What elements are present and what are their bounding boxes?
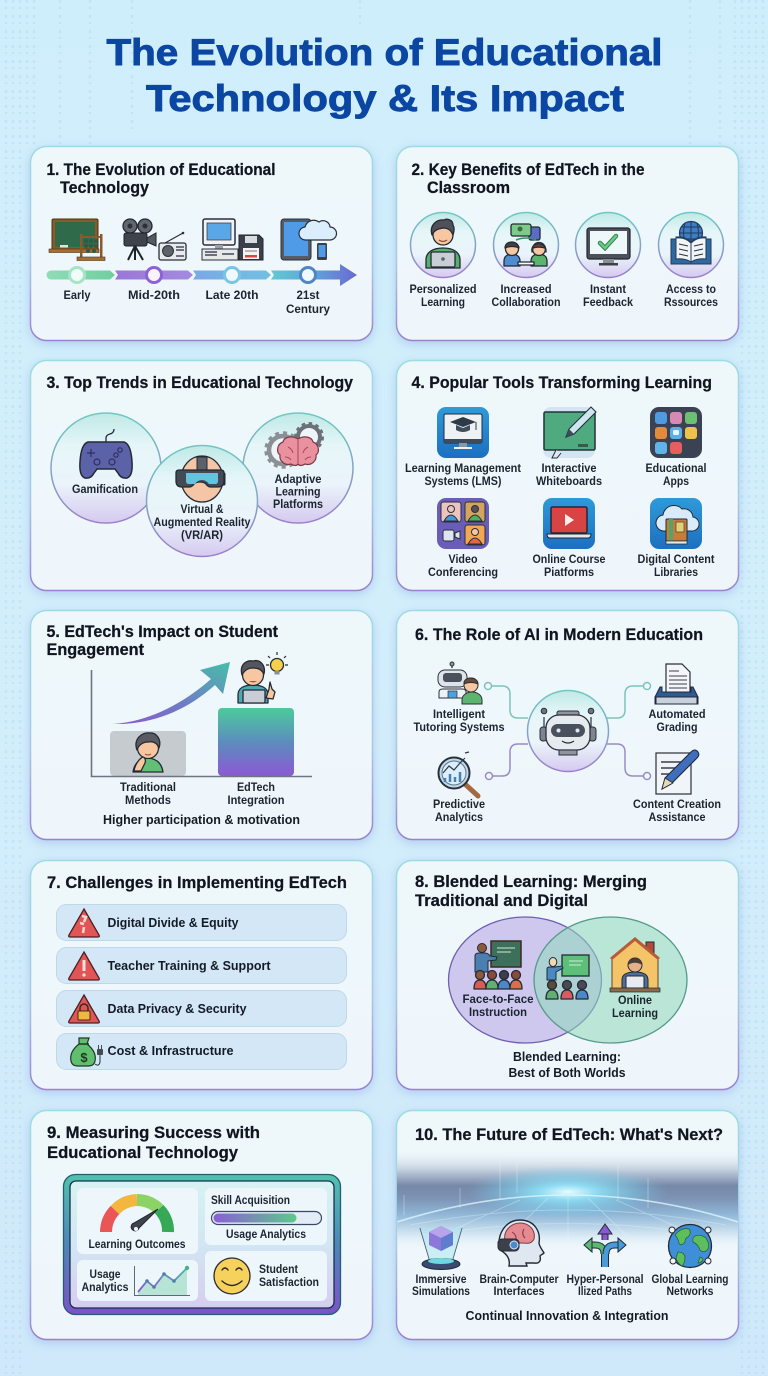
- benefit labels: [410, 284, 718, 309]
- chart labels: Methods: [125, 795, 171, 807]
- caption: best of both worlds: [508, 1049, 626, 1080]
- tile: skill acquisition: Skill Acquisition: [211, 1195, 290, 1207]
- circle: gamification: Gamification: [72, 484, 138, 496]
- future labels: [412, 1274, 728, 1298]
- icon: brain computer interface: [498, 1220, 544, 1266]
- icon: access to resources: [658, 212, 724, 278]
- heading 3: 3. Top Trends in Educational Technology: [46, 374, 354, 392]
- venn labels: Instruction: [469, 1007, 527, 1019]
- venn labels: Online: [618, 995, 652, 1007]
- icon: personalized learning: [410, 212, 476, 278]
- benefit labels: Personalized: [410, 284, 476, 296]
- future labels: Immersive: [416, 1274, 466, 1286]
- benefit labels: Collaboration: [492, 297, 560, 309]
- tile: learning outcomes gauge: Learning Outcomes: [88, 1239, 186, 1251]
- icon: chalkboard and abacus: [49, 219, 105, 260]
- heading 1: Technology: [60, 179, 150, 197]
- tool labels: Video: [448, 554, 478, 566]
- chart labels: [120, 782, 284, 807]
- timeline labels: 21st: [296, 290, 320, 302]
- heading 7: 7. Challenges in Implementing EdTech: [47, 874, 347, 892]
- panel: 8 blended learning: [396, 860, 738, 1090]
- bar chart: [92, 670, 312, 776]
- icon: online learning at home: [610, 938, 660, 992]
- timeline arrow: [46, 264, 357, 286]
- AI labels: Automated: [648, 709, 706, 721]
- heading 4: 4. Popular Tools Transforming Learning: [412, 374, 712, 392]
- icon: film camera and radio: [123, 219, 186, 260]
- row: cost and infrastructure: $: [80, 1050, 88, 1065]
- tile: learning management systems: [437, 407, 489, 458]
- title: The Evolution of Educational: [106, 32, 662, 73]
- circle: virtual and augmented reality: Virtual &: [180, 504, 224, 516]
- chart labels: EdTech: [237, 782, 275, 794]
- circle: adaptive learning: Adaptive: [274, 474, 322, 486]
- icon: immersive simulations: [420, 1226, 462, 1270]
- panel: 4 popular tools: [396, 360, 738, 590]
- AI labels: Analytics: [435, 812, 483, 824]
- icon: tablet cloud and phone: [281, 219, 337, 260]
- title: Technology & Its Impact: [146, 78, 624, 119]
- tile: skill acquisition: [205, 1188, 327, 1245]
- tool labels: Libraries: [654, 567, 698, 579]
- venn labels: Learning: [612, 1008, 658, 1020]
- tile: usage analytics chart: Usage: [90, 1269, 120, 1281]
- tile: online course platforms: [543, 498, 595, 549]
- icon: intelligent tutoring: [438, 662, 482, 704]
- tile: skill acquisition: Usage Analytics: [226, 1229, 306, 1241]
- future labels: Interfaces: [494, 1286, 544, 1298]
- icon: central AI robot: [528, 690, 608, 772]
- benefit labels: Rssources: [664, 297, 718, 309]
- tool labels: Whiteboards: [536, 476, 602, 488]
- caption: continual innovation: Continual Innovation & Integration: [466, 1308, 669, 1323]
- tile: student satisfaction: Student: [259, 1264, 298, 1276]
- row: digital divide: Digital Divide & Equity: [108, 915, 239, 930]
- row: teacher training: [56, 948, 346, 984]
- timeline labels: Late 20th: [206, 290, 258, 302]
- circle: adaptive learning: [243, 413, 353, 523]
- timeline labels: Century: [286, 304, 331, 316]
- icon: desktop computer and floppy: [202, 219, 263, 260]
- circle: virtual and augmented reality: (VR/AR): [181, 530, 223, 542]
- AI labels: Grading: [656, 722, 698, 734]
- growth arrow: [112, 662, 230, 724]
- heading 8: 8. Blended Learning: Merging: [415, 873, 647, 891]
- benefit labels: Feedback: [583, 297, 634, 309]
- AI labels: Intelligent: [433, 709, 485, 721]
- icon: predictive analytics: [438, 752, 478, 796]
- heading 5: [46, 623, 278, 659]
- circle: adaptive learning: Learning: [276, 486, 320, 498]
- tile: usage analytics chart: [77, 1260, 198, 1301]
- icon: global learning networks: [668, 1224, 712, 1268]
- AI labels: Predictive: [433, 799, 485, 811]
- icon: face to face teacher: [474, 941, 522, 989]
- venn labels: [462, 994, 658, 1020]
- heading 8: [415, 873, 647, 910]
- panel: 7 challenges: [30, 860, 372, 1090]
- icon: engaged student with laptop: [238, 652, 288, 703]
- future labels: Networks: [666, 1286, 714, 1298]
- future labels: Global Learning: [652, 1274, 728, 1286]
- future labels: Hyper-Personal: [566, 1274, 644, 1286]
- row: teacher training: Teacher Training & Support: [108, 958, 271, 973]
- future labels: Simulations: [412, 1286, 470, 1298]
- panel: 2 key benefits: [396, 146, 738, 340]
- circle: gamification: [51, 413, 161, 523]
- panel: 3 top trends: [30, 360, 372, 590]
- dashboard frame: [64, 1174, 340, 1314]
- icon: automated grading: [655, 664, 698, 704]
- heading 2: [412, 161, 644, 197]
- tool labels: Conferencing: [428, 567, 498, 579]
- heading 1: [46, 161, 276, 197]
- icon: instant feedback: [576, 212, 640, 278]
- tool labels: [405, 463, 715, 579]
- icon: blended classroom: [546, 955, 589, 999]
- heading 8: Traditional and Digital: [415, 892, 588, 910]
- heading 10: 10. The Future of EdTech: What's Next?: [415, 1126, 723, 1144]
- futuristic horizon band: [397, 1158, 738, 1242]
- row: cost and infrastructure: Cost & Infrastructure: [108, 1043, 234, 1058]
- icon: collaboration: [494, 212, 558, 278]
- row: digital divide: [56, 904, 346, 940]
- benefit labels: Learning: [421, 297, 465, 309]
- heading 5: 5. EdTech's Impact on Student: [46, 623, 278, 641]
- circle: virtual and augmented reality: [146, 446, 258, 556]
- tool labels: Piatforms: [544, 567, 594, 579]
- heading 6: 6. The Role of AI in Modern Education: [415, 626, 703, 644]
- tile: student satisfaction: [205, 1251, 327, 1301]
- heading 9: [47, 1124, 260, 1162]
- heading 9: Educational Technology: [47, 1144, 239, 1162]
- benefit labels: Access to: [666, 284, 716, 296]
- caption: higher participation: Higher participation & motivation: [103, 812, 300, 827]
- icon: content creation: [656, 750, 699, 794]
- benefit labels: Instant: [590, 284, 626, 296]
- tile: student satisfaction: Satisfaction: [259, 1277, 319, 1289]
- panel: 9 measuring success: [30, 1110, 372, 1340]
- heading 9: 9. Measuring Success with: [47, 1124, 260, 1142]
- tile: usage analytics chart: Analytics: [82, 1282, 128, 1294]
- benefit labels: Increased: [500, 284, 552, 296]
- circle: virtual and augmented reality: Augmented Reality: [154, 517, 251, 529]
- tile: educational apps: [650, 407, 702, 458]
- row: data privacy: Data Privacy & Security: [108, 1001, 247, 1016]
- tool labels: Systems (LMS): [424, 476, 502, 488]
- tool labels: Learning Management: [405, 463, 521, 475]
- AI labels: Assistance: [648, 812, 706, 824]
- AI labels: [414, 709, 721, 824]
- tool labels: Digital Content: [638, 554, 715, 566]
- venn diagram: [448, 917, 687, 1043]
- heading 2: Classroom: [427, 179, 510, 197]
- heading 1: 1. The Evolution of Educational: [46, 161, 276, 179]
- chart labels: Integration: [228, 795, 284, 807]
- row: cost and infrastructure: [56, 1034, 346, 1070]
- title: [106, 32, 662, 119]
- future labels: Ilized Paths: [578, 1286, 632, 1298]
- AI labels: Tutoring Systems: [414, 722, 504, 734]
- circle: adaptive learning: Platforms: [273, 499, 323, 511]
- future labels: Brain-Computer: [480, 1274, 559, 1286]
- timeline labels: Early: [64, 290, 91, 302]
- timeline labels: Mid-20th: [128, 290, 180, 302]
- heading 2: 2. Key Benefits of EdTech in the: [412, 161, 644, 179]
- tile: video conferencing: [437, 498, 489, 549]
- panel: 10 future of EdTech: [396, 1110, 738, 1340]
- row: data privacy: [56, 990, 346, 1026]
- tile: interactive whiteboards: [543, 407, 596, 458]
- venn labels: Face-to-Face: [462, 994, 534, 1006]
- icon: bored student: [133, 733, 163, 772]
- panel: 6 role of AI: [396, 610, 738, 840]
- AI labels: Content Creation: [633, 799, 721, 811]
- tool labels: Online Course: [532, 554, 606, 566]
- heading 5: Engagement: [46, 641, 144, 659]
- caption: best of both worlds: Best of Both Worlds: [508, 1065, 626, 1080]
- tile: learning outcomes gauge: [77, 1188, 198, 1254]
- connectors: [484, 682, 650, 780]
- panel: 1 evolution timeline: [30, 146, 372, 340]
- chart labels: Traditional: [120, 782, 176, 794]
- tool labels: Apps: [663, 476, 689, 488]
- timeline labels: [64, 290, 331, 316]
- panel: 5 student engagement: [30, 610, 372, 840]
- tool labels: Educational: [646, 463, 706, 475]
- icon: hyper-personalized paths: [584, 1224, 626, 1267]
- tool labels: Interactive: [542, 463, 596, 475]
- tile: digital content libraries: [650, 498, 702, 549]
- caption: best of both worlds: Blended Learning:: [513, 1049, 621, 1064]
